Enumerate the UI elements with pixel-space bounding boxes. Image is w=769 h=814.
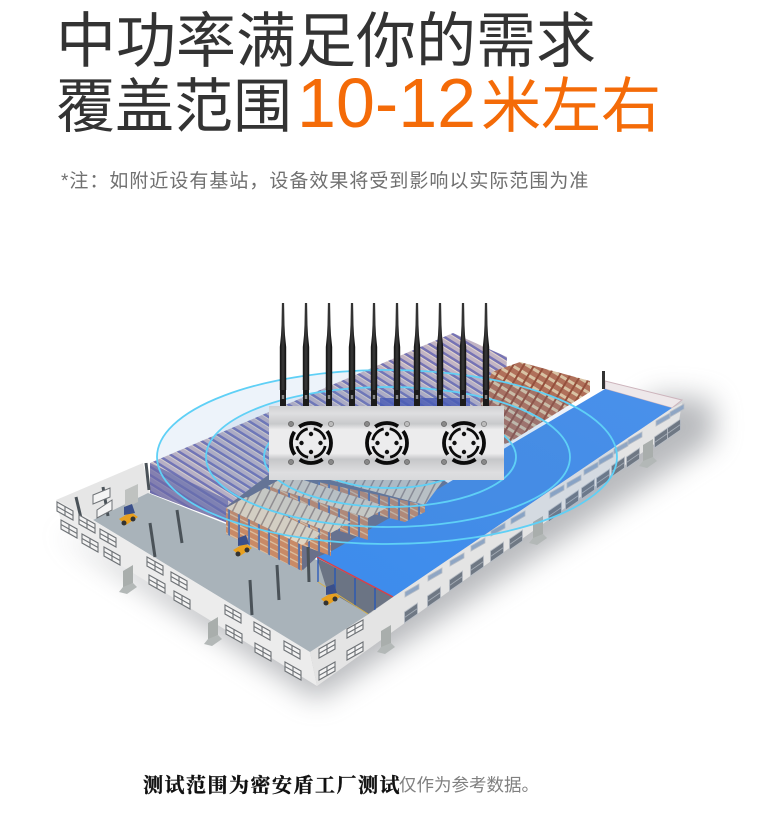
device plate	[269, 406, 504, 480]
antennas	[280, 303, 489, 406]
windows near front corner	[319, 620, 363, 680]
building shadow	[56, 395, 715, 700]
blue mezzanine roof	[317, 389, 672, 597]
footnote: *注：如附近设有基站，设备效果将受到影响以实际范围为准	[61, 170, 589, 192]
windows on left walls	[57, 488, 301, 680]
area under mezzanine	[317, 557, 393, 614]
test note bold: 测试范围为密安盾工厂测试	[143, 773, 401, 797]
left front wall	[56, 500, 317, 686]
rack block base	[227, 470, 448, 570]
rack row 2	[245, 488, 351, 556]
title line 2: coverage range: 覆盖范围10-12米左右	[56, 64, 661, 142]
back wall fence	[602, 371, 682, 408]
warehouse illustration	[56, 333, 715, 700]
rear right racks	[480, 362, 590, 450]
forklifts	[119, 504, 340, 606]
test note light: 仅作为参考数据。	[399, 775, 539, 795]
rack row 1	[226, 497, 322, 571]
rack row 4	[300, 466, 442, 522]
jammer device	[269, 303, 504, 480]
doors	[119, 439, 657, 654]
cooling fans	[288, 421, 487, 465]
rack row 3	[268, 475, 388, 540]
title line 1: 中功率满足你的需求	[56, 8, 596, 75]
warehouse floor	[93, 493, 372, 652]
purple storage racks	[150, 333, 507, 523]
signal coverage rings	[157, 370, 617, 544]
left end wall	[56, 463, 150, 520]
building pillars	[76, 463, 309, 615]
orange storage racks	[226, 362, 590, 571]
right front wall	[310, 403, 682, 686]
windows on right wall	[404, 404, 684, 623]
